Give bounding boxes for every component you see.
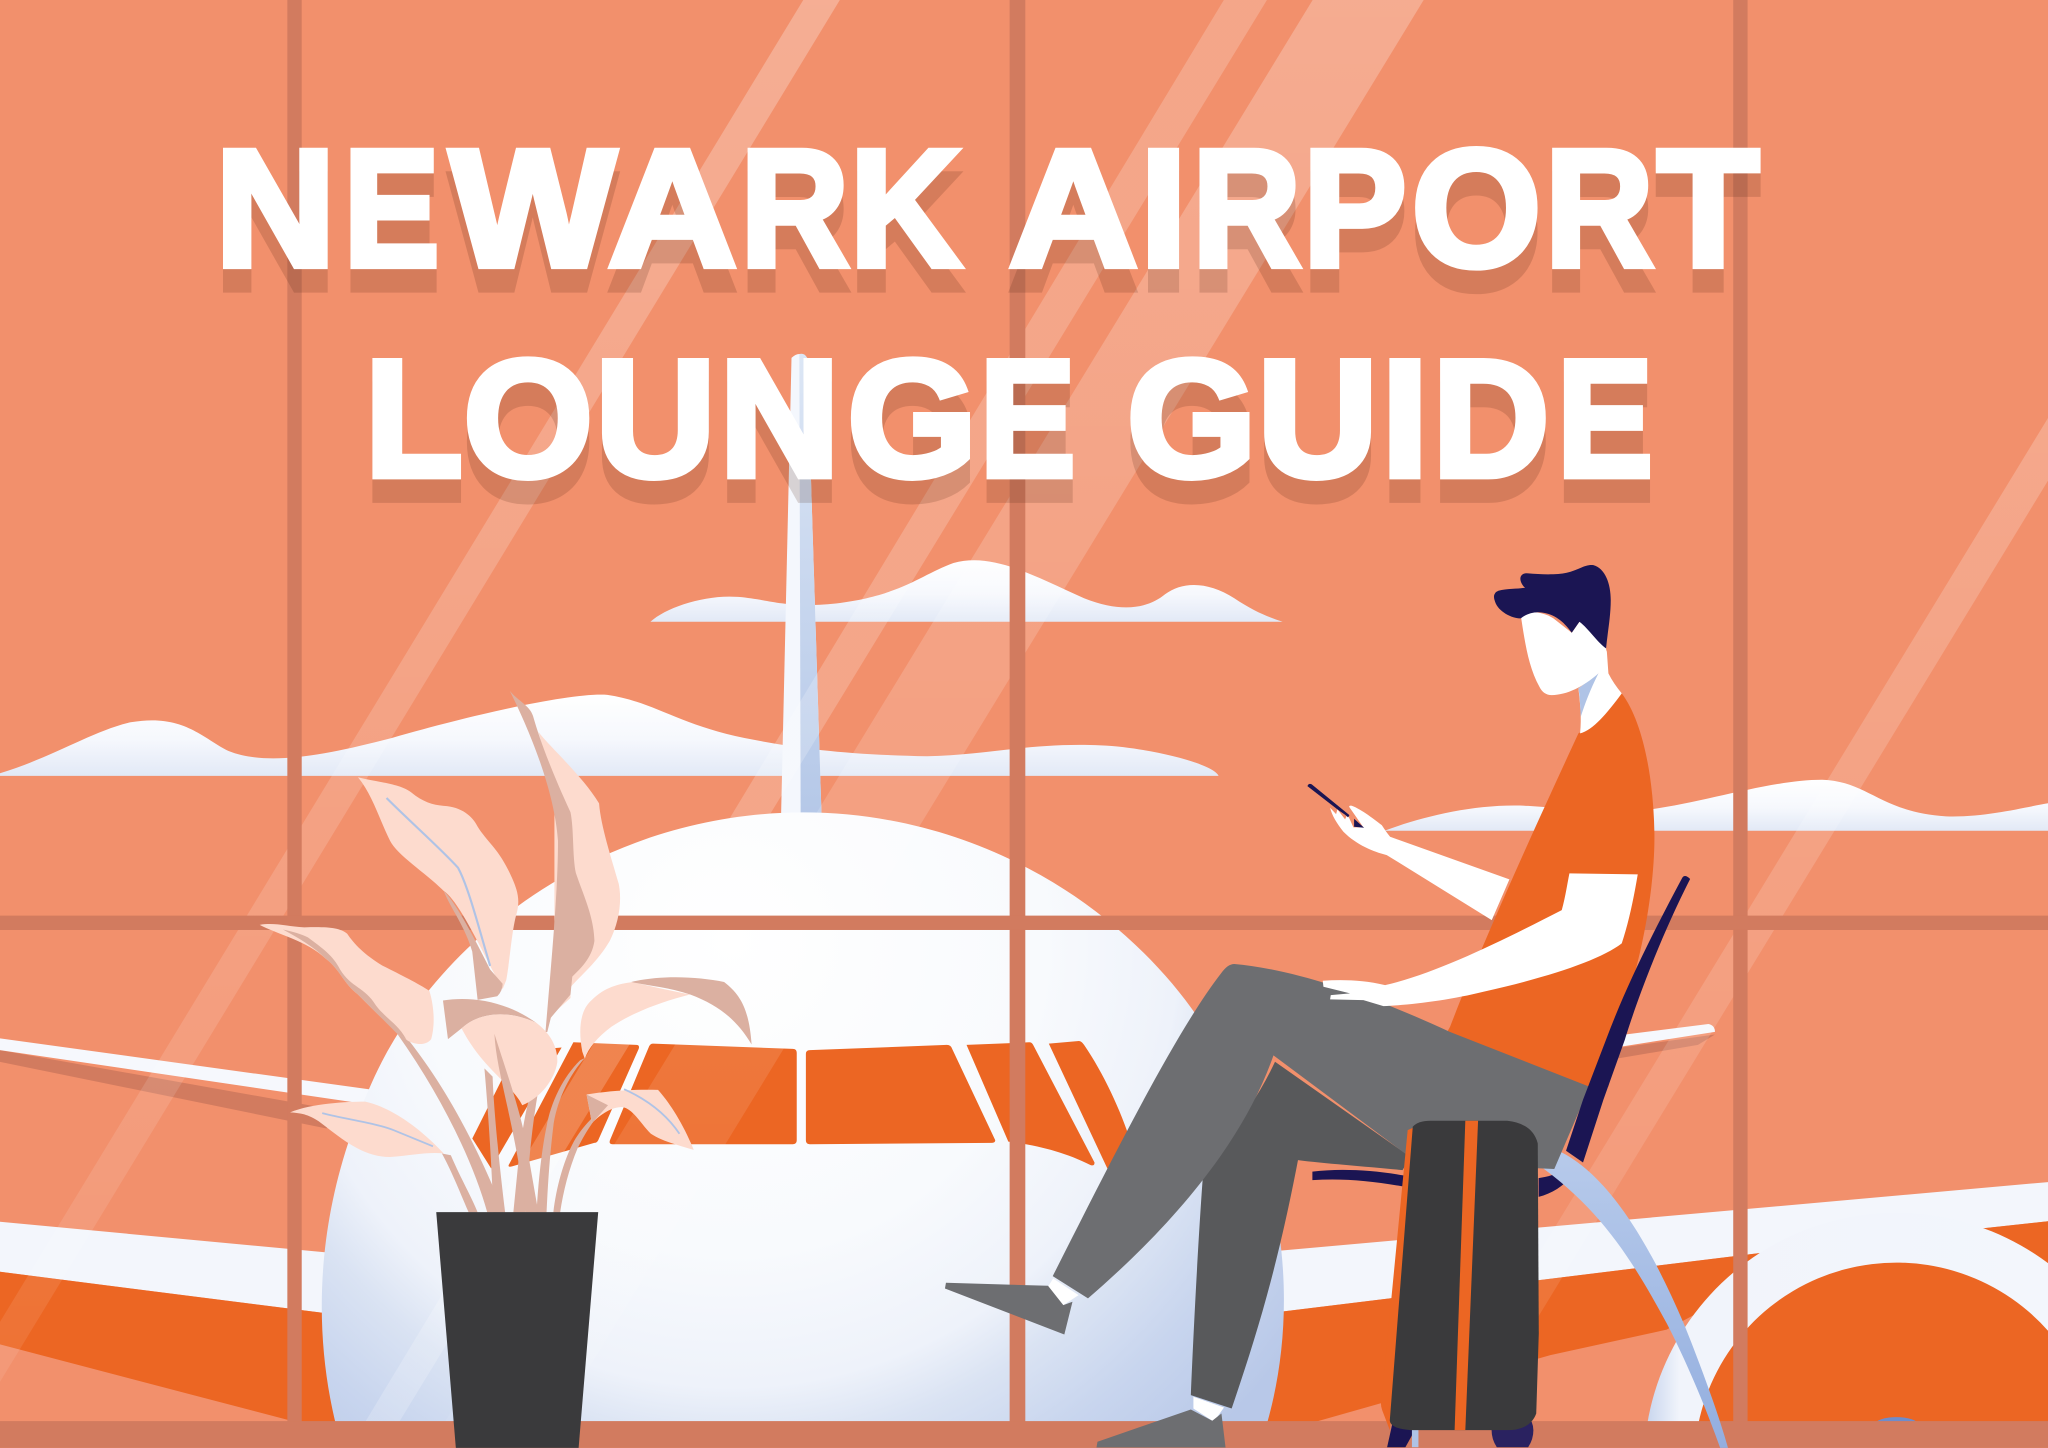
seated traveller with phone <box>945 565 1728 1448</box>
plant leaves and stems <box>260 691 752 1212</box>
title line 2: U <box>596 327 715 512</box>
suitcase <box>1381 1121 1539 1447</box>
title line 1: A <box>1009 116 1137 301</box>
title line 1: E <box>344 116 439 301</box>
title line 1: R <box>1193 116 1301 301</box>
leaf left <box>260 924 434 1044</box>
near arm <box>1323 873 1638 1006</box>
potted plant <box>260 691 752 1448</box>
chair back <box>1566 876 1690 1162</box>
stems <box>397 1034 608 1212</box>
leaf small right <box>587 1089 694 1150</box>
title line 2: L <box>365 327 462 512</box>
title line 1: W <box>450 116 616 301</box>
near wing left <box>0 1222 342 1430</box>
cockpit windows <box>472 1041 1131 1169</box>
leaf centre <box>443 999 557 1105</box>
title line 2: I <box>1382 327 1428 512</box>
torso <box>1417 650 1654 1087</box>
title line 1: K <box>850 116 961 301</box>
leaf right <box>580 977 752 1059</box>
stem crossing centre leaf <box>494 1034 538 1212</box>
title line 1: P <box>1303 116 1406 301</box>
aeroplane tail fin <box>781 354 822 816</box>
title line 2: U <box>1258 327 1378 512</box>
title line 1: R <box>1545 116 1653 301</box>
title <box>216 116 1759 512</box>
head <box>1494 565 1611 695</box>
title line 2: G <box>1127 327 1256 512</box>
far arm and phone <box>1307 784 1509 920</box>
plant pot <box>436 1212 598 1448</box>
aeroplane fuselage <box>322 812 1284 1424</box>
near wing right <box>1260 1182 2048 1426</box>
leaf bottom left <box>290 1102 444 1157</box>
cloud: left long <box>0 695 1219 776</box>
title line 1: I <box>1141 116 1187 301</box>
engine <box>1647 1213 2048 1430</box>
far wing left <box>0 1038 379 1129</box>
title line 2: E <box>1557 327 1653 512</box>
title line 2: O <box>464 327 593 512</box>
title line 1: O <box>1412 116 1541 301</box>
title line 2: N <box>720 327 839 512</box>
leaf top left <box>358 777 518 1000</box>
leaf tall upright <box>510 691 620 1032</box>
title line 1: T <box>1657 116 1759 301</box>
title line 2: E <box>980 327 1075 512</box>
title line 1: A <box>608 116 736 301</box>
cloud: upper <box>650 560 1283 622</box>
title line 1: R <box>741 116 849 301</box>
far wing right <box>1574 1024 1715 1066</box>
title line 2: G <box>848 327 977 512</box>
cloud: right <box>1384 780 2048 831</box>
legs and shoes <box>945 964 1590 1447</box>
title line 2: D <box>1433 327 1549 512</box>
chair legs and seat <box>1312 1144 1728 1448</box>
title line 1: N <box>216 116 335 301</box>
